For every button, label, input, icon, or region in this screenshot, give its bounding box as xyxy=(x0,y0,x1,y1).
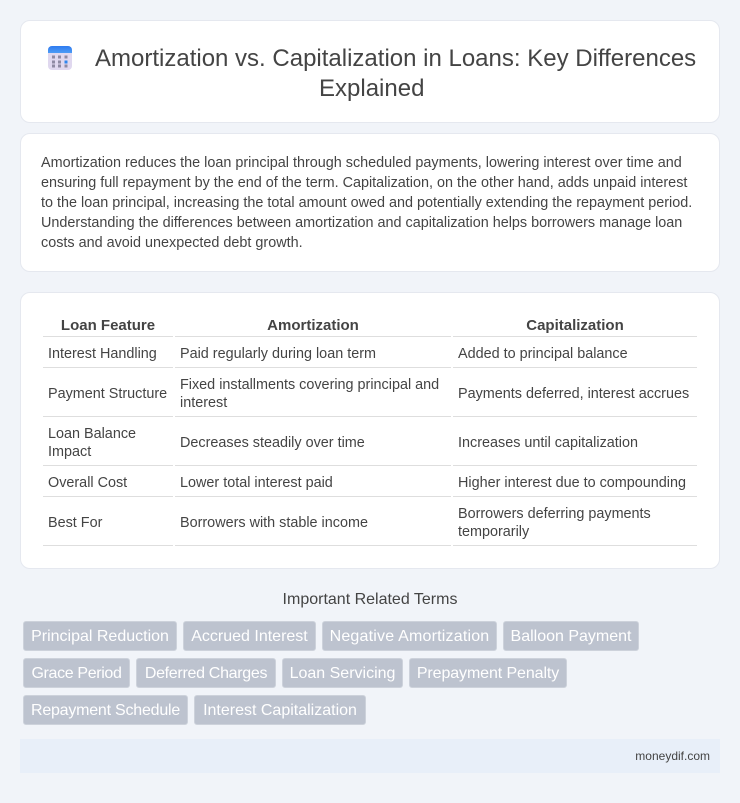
row: payment structure: Fixed installments covering principal and xyxy=(180,377,439,393)
intro paragraph: ensuring full repayment by the end of the term. Capitalization, on the other hand, adds unpaid interest xyxy=(41,175,687,191)
row: interest handling: Added to principal balance xyxy=(458,346,628,362)
row: overall cost xyxy=(48,475,686,491)
comparison table xyxy=(43,317,697,546)
row: overall cost: Higher interest due to compounding xyxy=(458,475,686,491)
row: loan balance impact: Loan Balance xyxy=(48,426,136,442)
row: payment structure: interest xyxy=(180,395,227,411)
related terms tags: Interest Capitalization xyxy=(203,702,357,719)
title: Explained xyxy=(319,75,424,102)
related terms tags: Loan Servicing xyxy=(290,665,395,682)
row: best for: temporarily xyxy=(458,524,529,540)
row: loan balance impact xyxy=(48,426,638,460)
row: loan balance impact: Increases until capitalization xyxy=(458,435,638,451)
row: loan balance impact: Impact xyxy=(48,444,91,460)
row: overall cost: Lower total interest paid xyxy=(180,475,333,491)
row: best for: Best For xyxy=(48,515,102,531)
column headers: Amortization xyxy=(267,317,359,334)
row: interest handling xyxy=(48,346,628,362)
related terms tags xyxy=(23,621,639,725)
related terms tags: Negative Amortization xyxy=(330,628,489,645)
related terms tags: Balloon Payment xyxy=(511,628,631,645)
footer source label: moneydif.com xyxy=(635,749,710,763)
related terms tags: Accrued Interest xyxy=(191,628,308,645)
row: overall cost: Overall Cost xyxy=(48,475,127,491)
row: best for: Borrowers deferring payments xyxy=(458,506,651,522)
row: payment structure: Payments deferred, interest accrues xyxy=(458,386,689,402)
row: payment structure xyxy=(48,377,689,411)
intro text panel xyxy=(20,133,720,272)
icon: calendar xyxy=(48,46,72,70)
intro paragraph: to the loan principal, increasing the total amount owed and potentially extending the repayment period. xyxy=(41,195,692,211)
row: payment structure: Payment Structure xyxy=(48,386,167,402)
column headers: Loan Feature xyxy=(61,317,155,334)
row: interest handling: Interest Handling xyxy=(48,346,157,362)
column headers xyxy=(61,317,624,334)
related terms tags: Grace Period xyxy=(31,665,122,682)
related terms tags: Deferred Charges xyxy=(145,665,267,682)
related terms heading: Important Related Terms xyxy=(283,591,457,608)
title: Amortization vs. Capitalization in Loans: Key Differences xyxy=(95,45,696,72)
row: best for: Borrowers with stable income xyxy=(180,515,368,531)
row: loan balance impact: Decreases steadily over time xyxy=(180,435,365,451)
comparison table panel xyxy=(20,292,720,569)
row: interest handling: Paid regularly during loan term xyxy=(180,346,376,362)
intro paragraph xyxy=(41,155,692,251)
column headers: Capitalization xyxy=(526,317,624,334)
row: best for xyxy=(48,506,651,540)
intro paragraph: Amortization reduces the loan principal through scheduled payments, lowering interest over time and xyxy=(41,155,682,171)
related terms tags: Principal Reduction xyxy=(31,628,169,645)
related terms tags: Prepayment Penalty xyxy=(417,665,559,682)
title xyxy=(95,45,696,102)
footer bar xyxy=(20,739,720,773)
intro paragraph: Understanding the differences between amortization and capitalization helps borrowers manage loan xyxy=(41,215,682,231)
header panel xyxy=(20,20,720,123)
intro paragraph: costs and avoid unexpected debt growth. xyxy=(41,235,303,251)
related terms tags: Repayment Schedule xyxy=(31,702,180,719)
